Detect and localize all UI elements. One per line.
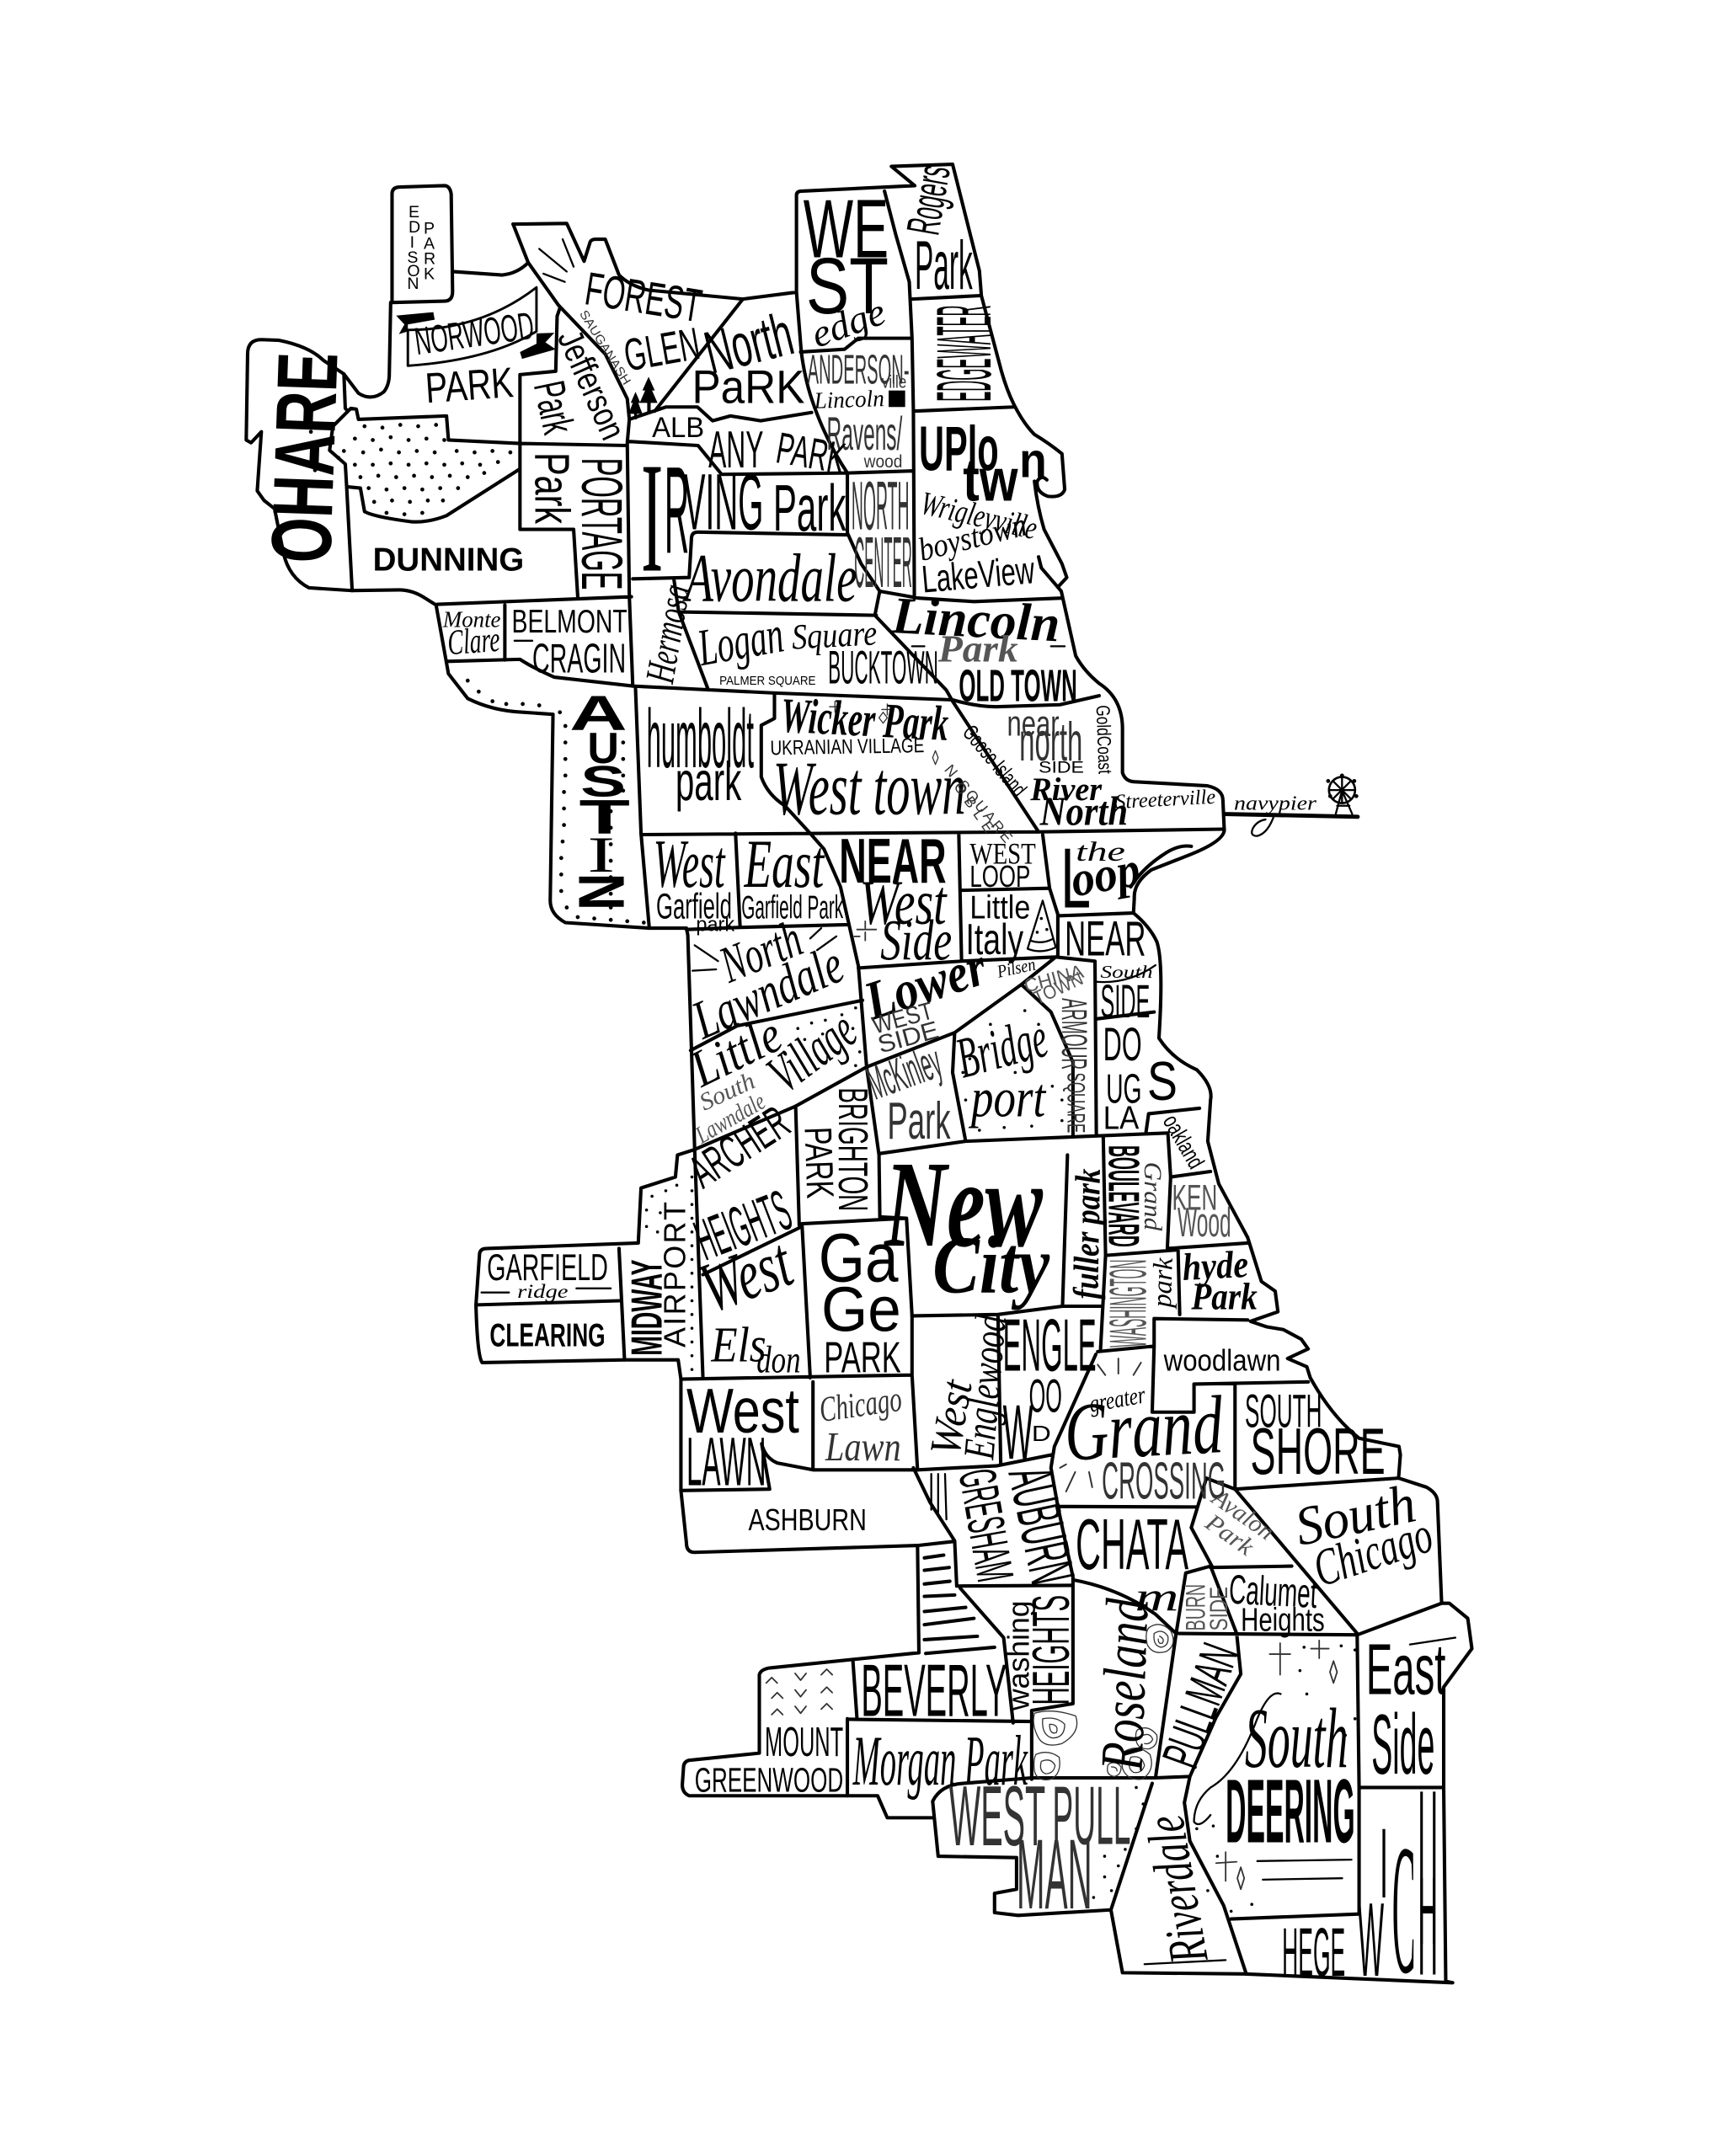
- infographic: hand-lettered Chicago neighborhoods map: OLD TOWN: [959, 661, 1077, 712]
- dotted pattern: north-west area: [339, 424, 510, 515]
- label: South Lawndale: South: [696, 1068, 759, 1117]
- ribbon: Norwood Park banner: [396, 287, 556, 366]
- label: Garfield Ridge: GARFIELD: [487, 1247, 608, 1289]
- label: Englewood: OO: [1029, 1370, 1062, 1422]
- label: Near South Side: [1065, 912, 1153, 1027]
- label: Near North Side: SIDE: [1039, 759, 1084, 777]
- label: Woodlawn: woodlawn: [1163, 1343, 1280, 1378]
- label: Armour Square: ARMOUR: [1055, 998, 1094, 1070]
- label: Belmont Cragin: [512, 604, 628, 681]
- label: Lincoln Square: Lincoln: [813, 386, 884, 414]
- label: Norwood: NORWOOD: [412, 304, 537, 363]
- label: Austin: N: [565, 873, 637, 910]
- label: Brighton Park: PARK: [796, 1126, 841, 1199]
- label: West Ridge: ST: [806, 242, 889, 331]
- South swoosh: Near South: [1097, 965, 1156, 982]
- label: New City: City: [932, 1220, 1050, 1311]
- label: Archer Heights: ARCHER: [680, 1096, 798, 1198]
- label: Little Village: Little: [681, 1006, 791, 1098]
- hatching: Beverly stripes: [924, 1556, 995, 1653]
- label: Jefferson Park: Park: [524, 377, 583, 439]
- small dots: O'Hare: [311, 432, 315, 470]
- label: Edison Park: D: [409, 218, 420, 237]
- label: Douglas: [1103, 1018, 1178, 1136]
- label: Riverdale: Riverdale: [1135, 1811, 1220, 1968]
- label: Washington Heights: [1001, 1595, 1081, 1711]
- label: New City: New: [884, 1135, 1044, 1273]
- label: New City: [884, 1135, 1050, 1311]
- label: Irving Park: VING: [684, 458, 763, 547]
- icon: Navy Pier line: [1225, 814, 1358, 836]
- label: Washington Park: park: [1147, 1257, 1179, 1310]
- rays: Grand Crossing: [1060, 1358, 1141, 1492]
- label: Ravenswood: wood: [863, 452, 902, 472]
- label: Austin: T: [579, 790, 630, 844]
- label: Edison Park: R: [424, 249, 435, 268]
- label: Douglas: S: [1147, 1050, 1178, 1112]
- label: West Pullman: [949, 1769, 1130, 1929]
- label: Near West Side: Side: [880, 909, 952, 973]
- label: Chinatown: CHINA: [1022, 960, 1087, 997]
- dashes: labels: [482, 641, 1455, 1964]
- neighborhood borders south: [681, 1136, 1443, 1974]
- label: West Ridge: [804, 182, 891, 355]
- label: Near North Side: [1007, 703, 1084, 777]
- label: Gold Coast: GoldCoast: [1092, 705, 1116, 775]
- label: North Center: [852, 468, 912, 602]
- label: Albany Park: PARK: [772, 424, 849, 484]
- label: Clearing: CLEARING: [489, 1317, 606, 1353]
- city boundary: [246, 164, 1471, 1983]
- label: Mount Greenwood: [695, 1720, 843, 1799]
- Edison Park box: [392, 185, 452, 302]
- label: Navy Pier: navypier: [1234, 792, 1316, 815]
- label: Edison Park: O: [407, 262, 420, 280]
- label: Lincoln Park: Lincoln: [890, 587, 1061, 653]
- label: South Deering: [1226, 1691, 1355, 1862]
- infographic: hand-lettered Chicago neighborhoods map: ENGLE: [1003, 1304, 1097, 1387]
- label: Chicago Lawn: [817, 1380, 904, 1470]
- label: Uptown: UPlo: [919, 413, 999, 483]
- label: East Side: [1366, 1629, 1445, 1792]
- label: Little Italy: [965, 890, 1030, 964]
- label: Edison Park: I: [410, 233, 414, 252]
- label: Uptown: [919, 413, 1047, 514]
- label: Sauganash: SAUGANASH: [576, 308, 633, 387]
- label: Andersonville: [808, 348, 910, 393]
- map outlines: city boundary and neighborhood borders: [246, 164, 1471, 1983]
- label: Albany Park: [652, 412, 849, 484]
- infographic: hand-lettered Chicago neighborhoods map: CENTER: [854, 522, 912, 602]
- infographic: hand-lettered Chicago neighborhoods map: Ravens/: [827, 408, 903, 460]
- label: Irving Park: Park: [773, 471, 846, 545]
- label: River North: North: [1039, 788, 1128, 835]
- label: Lower West Side: [857, 937, 994, 1059]
- label: West Loop: LOOP: [969, 859, 1030, 894]
- infographic: hand-lettered Chicago neighborhoods map: NORTH: [852, 468, 910, 545]
- label: Logan Square: Square: [791, 613, 878, 658]
- infographic: hand-lettered Chicago neighborhoods map: AUBURN: [995, 1460, 1089, 1590]
- infographic: hand-lettered Chicago neighborhoods map: C: [1392, 1806, 1416, 2012]
- label: Chicago Lawn: Chicago: [817, 1380, 904, 1430]
- label: West Garfield Park: Garfield: [656, 887, 732, 926]
- label: Park (Norwood): PARK: [424, 358, 515, 412]
- label: Lincoln Park: Park: [937, 627, 1018, 670]
- infographic: hand-lettered Chicago neighborhoods map: Rogers: [897, 162, 960, 238]
- label: Edison Park: E: [409, 203, 419, 221]
- label: Near West Side: NEAR: [839, 825, 947, 896]
- label: Forest: FOREST: [582, 262, 705, 332]
- label: Edison Park: S: [407, 248, 418, 267]
- label: South Shore: SOUTH: [1245, 1385, 1322, 1438]
- label: Park (North Park): PaRK: [692, 360, 804, 413]
- label: Bridgeport: Bridge: [949, 1005, 1054, 1090]
- label: West Garfield Park: [654, 825, 735, 936]
- icon: pizza slice: [1028, 900, 1055, 951]
- label: Edison Park: N: [407, 275, 419, 293]
- label: Rogers Park: [897, 162, 973, 304]
- label: West Elsdon: West: [690, 1222, 804, 1328]
- label: Edison Park: P: [424, 220, 435, 238]
- dots: West Pullman: [1093, 1787, 1143, 1897]
- label: West Loop: WEST: [969, 836, 1036, 870]
- label: Ashburn: ASHBURN: [748, 1502, 867, 1537]
- label: West Englewood: West: [921, 1375, 982, 1460]
- label: Gage Park: Ge: [821, 1273, 901, 1344]
- label: Kenwood: [1172, 1178, 1231, 1246]
- label: Douglas: UG: [1106, 1066, 1142, 1112]
- label: Edison Park: A: [424, 235, 435, 253]
- label: Goose Island: Goose Island: [958, 720, 1032, 802]
- label: Brighton Park: BRIGHTON: [830, 1087, 875, 1211]
- label: East Garfield Park: [741, 825, 843, 926]
- label: Ukrainian Village: UKRANIAN VILLAGE: [770, 734, 925, 760]
- label: West Elsdon: Els: [710, 1317, 766, 1372]
- label: Gage Park: [819, 1220, 901, 1382]
- icon: ferris wheel: [1328, 776, 1356, 814]
- sparkles: Wicker Park: [830, 702, 938, 765]
- label: Irving Park: I: [641, 430, 663, 606]
- label: Bridgeport: port: [969, 1069, 1047, 1129]
- label: North Lawndale: North: [712, 910, 810, 995]
- label: Avondale: Avondale: [682, 539, 857, 616]
- label: Kenwood: Wood: [1178, 1200, 1231, 1246]
- label: West Garfield Park: West: [654, 825, 726, 902]
- infographic: hand-lettered Chicago neighborhoods map: HEIGHTS: [686, 1177, 799, 1273]
- label: Irving Park: R: [665, 441, 689, 579]
- rays: North Lawndale: [692, 928, 836, 971]
- label: Burnside: SIDE: [1205, 1587, 1233, 1630]
- label: Monte Clare: Clare: [446, 620, 501, 663]
- label: Dunning: DUNNING: [373, 542, 524, 579]
- label: Pilsen: Pilsen: [995, 954, 1037, 982]
- stripes: Gresham: [932, 1474, 947, 1519]
- infographic: hand-lettered Chicago neighborhoods map: GRESHAM: [948, 1465, 1024, 1586]
- label: Hyde Park: [1181, 1242, 1258, 1317]
- label: West Lawn: West: [686, 1375, 799, 1446]
- label: Hegewisch: W: [1358, 1882, 1384, 1999]
- label: The Loop: [1060, 831, 1144, 926]
- label: Lake View: LakeView: [920, 548, 1037, 601]
- icon: pine trees: [628, 376, 658, 419]
- dots: Bridgeport: [963, 1011, 1062, 1130]
- label: Oakland: oakland: [1158, 1110, 1210, 1173]
- label: Noble Square: N SQUARE: [941, 761, 1016, 846]
- label: Edison Park: K: [424, 264, 435, 283]
- label: Roseland: Roseland: [1088, 1597, 1162, 1772]
- label: Glen: GLEN: [620, 318, 703, 382]
- infographic: hand-lettered Chicago neighborhoods map: Morgan Park: [852, 1721, 1028, 1801]
- label: Austin: A: [569, 686, 628, 741]
- label: Albany Park: ANY: [708, 421, 763, 479]
- label: Avalon Park: Park: [1199, 1508, 1259, 1561]
- label: Near West Side: [839, 825, 952, 973]
- label: Douglas: LA: [1103, 1100, 1140, 1136]
- label: Noble Square: OBLE: [951, 779, 997, 835]
- label: Ravenswood: [827, 408, 903, 472]
- dotted pattern: Midway dots: [647, 1177, 692, 1369]
- label: Lower West Side: SIDE: [875, 1016, 942, 1059]
- label: Armour Square: SQUARE: [1061, 1072, 1089, 1133]
- label: McKinley Park: Park: [887, 1092, 951, 1150]
- label: Lower West Side: WEST: [869, 997, 937, 1040]
- label: McKinley Park: [861, 1035, 951, 1150]
- label: Burnside: [1180, 1584, 1233, 1630]
- label: Pullman: PULLMAN: [1152, 1636, 1250, 1775]
- label: Greater Grand Crossing: Grand: [1062, 1380, 1226, 1479]
- dotted pattern: Austin border dots: [467, 680, 644, 923]
- label: Near West Side: West: [860, 868, 948, 938]
- infographic: hand-lettered Chicago neighborhoods map: Side: [1371, 1697, 1434, 1792]
- label: Andersonville: ville: [882, 372, 906, 392]
- label: Austin: I: [587, 827, 615, 883]
- label: West Ridge: WE: [804, 182, 889, 275]
- neighborhood borders north: [329, 191, 1099, 707]
- label: Uptown: n: [1019, 434, 1047, 488]
- label: Streeterville: Streeterville: [1114, 786, 1216, 814]
- label: The Loop: the: [1076, 837, 1125, 867]
- label: East Side: East: [1366, 1629, 1445, 1709]
- label: Little Village: [681, 1000, 868, 1105]
- label: East Garfield Park: Garfield Park: [741, 890, 843, 926]
- label: Hermosa: Hermosa: [636, 581, 699, 687]
- label: West Pullman: MAN: [1017, 1819, 1092, 1929]
- infographic: hand-lettered Chicago neighborhoods map: ANDERSON-: [808, 348, 910, 393]
- infographic: hand-lettered Chicago neighborhoods map: BUCKTOWN: [828, 641, 938, 693]
- South Deering flourish and accents: [1194, 1641, 1352, 1889]
- infographic: hand-lettered Chicago neighborhoods map: SIDE: [1101, 975, 1150, 1027]
- infographic: hand-lettered Chicago neighborhoods map: Park: [915, 227, 973, 304]
- label: West Pullman: WEST: [949, 1769, 1045, 1864]
- label: Chicago Lawn: Lawn: [825, 1423, 901, 1470]
- infographic: hand-lettered Chicago neighborhoods map: WASHINGTON: [1099, 1260, 1157, 1348]
- label: West Garfield Park: park: [696, 913, 735, 936]
- label: The Loop: L: [1060, 831, 1091, 926]
- label: Kenwood: KEN: [1172, 1178, 1217, 1218]
- label: Jefferson Park: [524, 324, 633, 446]
- label: Uptown: tw: [963, 446, 1018, 514]
- label: Wrigleyville: Wrigleyville: [917, 485, 1040, 547]
- label: Near North Side: north: [1019, 711, 1082, 772]
- label: South Shore: [1245, 1385, 1386, 1488]
- label: Austin: U: [587, 724, 619, 773]
- label: Gage Park: Ga: [819, 1220, 899, 1297]
- label: Avalon Park: Avalon: [1206, 1483, 1279, 1545]
- label: Englewood: W: [1003, 1390, 1033, 1476]
- label: Little Village: Village: [756, 1000, 868, 1105]
- infographic: hand-lettered Chicago neighborhoods map: BOULEVARD: [1098, 1145, 1147, 1247]
- label: Belmont Cragin: BELMONT: [512, 604, 628, 640]
- label: Archer Heights: [680, 1096, 799, 1273]
- label: Bridgeport: [949, 1005, 1054, 1129]
- label: Washington Park: [1099, 1257, 1179, 1348]
- label: Garfield Ridge: ridge: [517, 1281, 569, 1302]
- icon: black square: [889, 391, 905, 407]
- label: Garfield Ridge: [487, 1247, 608, 1302]
- label: Englewood: D: [1032, 1421, 1051, 1446]
- label: South Chicago: [1290, 1473, 1439, 1598]
- label: Boystown: boystown: [915, 507, 1030, 568]
- label: Monte Clare: Monte: [442, 606, 500, 632]
- label: Jefferson Park: Jefferson: [550, 324, 633, 446]
- label: Irving Park: [641, 430, 846, 606]
- label: Midway Airport: MIDWAY: [623, 1259, 672, 1356]
- label: South Deering: South: [1245, 1691, 1348, 1785]
- label: Near South Side: South: [1101, 962, 1153, 982]
- label: West Lawn: [686, 1375, 799, 1500]
- label: Midway Airport: [623, 1202, 692, 1356]
- infographic: hand-lettered Chicago neighborhoods map: McKinley: [861, 1035, 948, 1109]
- rays: Forest Glen: [539, 239, 574, 282]
- label: Near South Side: NEAR: [1065, 912, 1146, 967]
- label: Wicker Park: Wicker Park: [779, 688, 950, 751]
- label: Englewood: [1003, 1304, 1097, 1476]
- label: Mount Greenwood: MOUNT: [765, 1720, 843, 1765]
- label: Logan Square: Logan: [693, 606, 788, 677]
- infographic: hand-lettered Chicago neighborhoods map: humboldt: [647, 692, 754, 785]
- Loop tail swash: [1130, 846, 1191, 887]
- label: West Town: West town: [773, 746, 965, 831]
- label: Austin: [565, 686, 637, 910]
- label: Near North Side: near: [1007, 703, 1060, 743]
- label: Austin: S: [580, 757, 626, 806]
- label: South Chicago: Chicago: [1306, 1506, 1439, 1598]
- label: Chatham: [1076, 1504, 1188, 1620]
- label: Burnside: BURN: [1180, 1584, 1211, 1630]
- label: Little Italy: Little: [969, 890, 1030, 926]
- label: Washington Heights: washing: [1001, 1600, 1036, 1711]
- label: North Lawndale: Lawndale: [684, 934, 852, 1051]
- label: Humboldt Park: [647, 692, 754, 812]
- neighborhood borders central: [477, 689, 1225, 1470]
- label: Little Italy: Italy: [965, 915, 1024, 964]
- label: South Chicago: South: [1290, 1473, 1421, 1558]
- label: River North: [1029, 771, 1128, 835]
- label: Lower West Side: Lower: [857, 937, 994, 1033]
- label: Albany Park: ALB: [652, 412, 704, 444]
- label: Humboldt Park: park: [676, 750, 741, 812]
- infographic: hand-lettered Chicago neighborhoods map: HEIGHTS: [1023, 1595, 1081, 1705]
- label: Gage Park: PARK: [824, 1333, 901, 1382]
- label: Greater Grand Crossing: greater: [1087, 1381, 1148, 1418]
- label: Belmont Cragin: CRAGIN: [532, 636, 626, 681]
- infographic: hand-lettered Chicago neighborhoods map: PORTAGE: [569, 458, 634, 590]
- label: Mount Greenwood: GREENWOOD: [695, 1760, 843, 1799]
- label: South Shore: SHORE: [1251, 1414, 1386, 1488]
- dots: South Deering: [1197, 1646, 1355, 1911]
- label: River North: River: [1029, 771, 1103, 808]
- label: West Ridge: edge: [805, 290, 891, 355]
- label: Hegewisch: I: [1380, 1808, 1388, 1919]
- label: O'Hare: OHARE: [254, 351, 356, 564]
- label: The Loop: oop: [1066, 841, 1144, 907]
- label: Brighton Park: [796, 1087, 875, 1211]
- label: Hyde Park: Park: [1190, 1274, 1258, 1317]
- label: North (North Park): North: [698, 301, 800, 387]
- label: Hyde Park: hyde: [1181, 1242, 1249, 1289]
- label: West Elsdon: [690, 1222, 804, 1380]
- label: Hegewisch: HEGE: [1282, 1914, 1345, 1991]
- dots: Little Village: [798, 1008, 860, 1065]
- infographic: hand-lettered Chicago neighborhoods map: DEERING: [1226, 1760, 1355, 1862]
- label: Grand (Boulevard): Grand: [1139, 1162, 1166, 1231]
- label: Calumet Heights: Calumet: [1228, 1567, 1318, 1617]
- label: Calumet Heights: Heights: [1241, 1602, 1325, 1638]
- label: Douglas: DO: [1103, 1018, 1142, 1070]
- label: Hegewisch: [1282, 1791, 1438, 2012]
- chevrons: Mount Greenwood: [766, 1669, 832, 1715]
- label: Monte Clare: [442, 606, 501, 663]
- label: West Elsdon: don: [756, 1337, 801, 1380]
- label: East Garfield Park: East: [744, 825, 825, 902]
- infographic: hand-lettered Chicago neighborhoods map: CROSSING: [1102, 1453, 1226, 1511]
- label: West Englewood: Englewood: [954, 1312, 1016, 1462]
- label: Midway Airport: AIRPORT: [657, 1202, 692, 1348]
- label: Greater Grand Crossing: [1062, 1380, 1226, 1511]
- label: Park (Portage Park): Park: [524, 452, 579, 524]
- label: West Englewood: [921, 1312, 1016, 1462]
- label: Chatham: m: [1135, 1573, 1179, 1620]
- infographic: hand-lettered Chicago neighborhoods map: PULL: [1052, 1769, 1130, 1861]
- label: South Lawndale: Lawndale: [691, 1088, 770, 1150]
- label: Chinatown: TOWN: [1030, 967, 1087, 1009]
- label: Calumet Heights: [1228, 1567, 1325, 1638]
- label: Palmer Square: PALMER SQUARE: [719, 675, 816, 688]
- crosses: Near West Side: [854, 921, 876, 941]
- infographic: hand-lettered Chicago neighborhoods map: CHATA: [1076, 1504, 1188, 1584]
- infographic: hand-lettered Chicago neighborhoods map: BEVERLY: [861, 1649, 1007, 1732]
- roses: Roseland: [1033, 1625, 1173, 1780]
- label: West Lawn: LAWN: [686, 1423, 766, 1500]
- label: West Loop: [969, 836, 1036, 894]
- label: Fuller Park: fuller park: [1066, 1168, 1108, 1299]
- infographic: hand-lettered Chicago neighborhoods map: H: [1418, 1859, 1438, 1966]
